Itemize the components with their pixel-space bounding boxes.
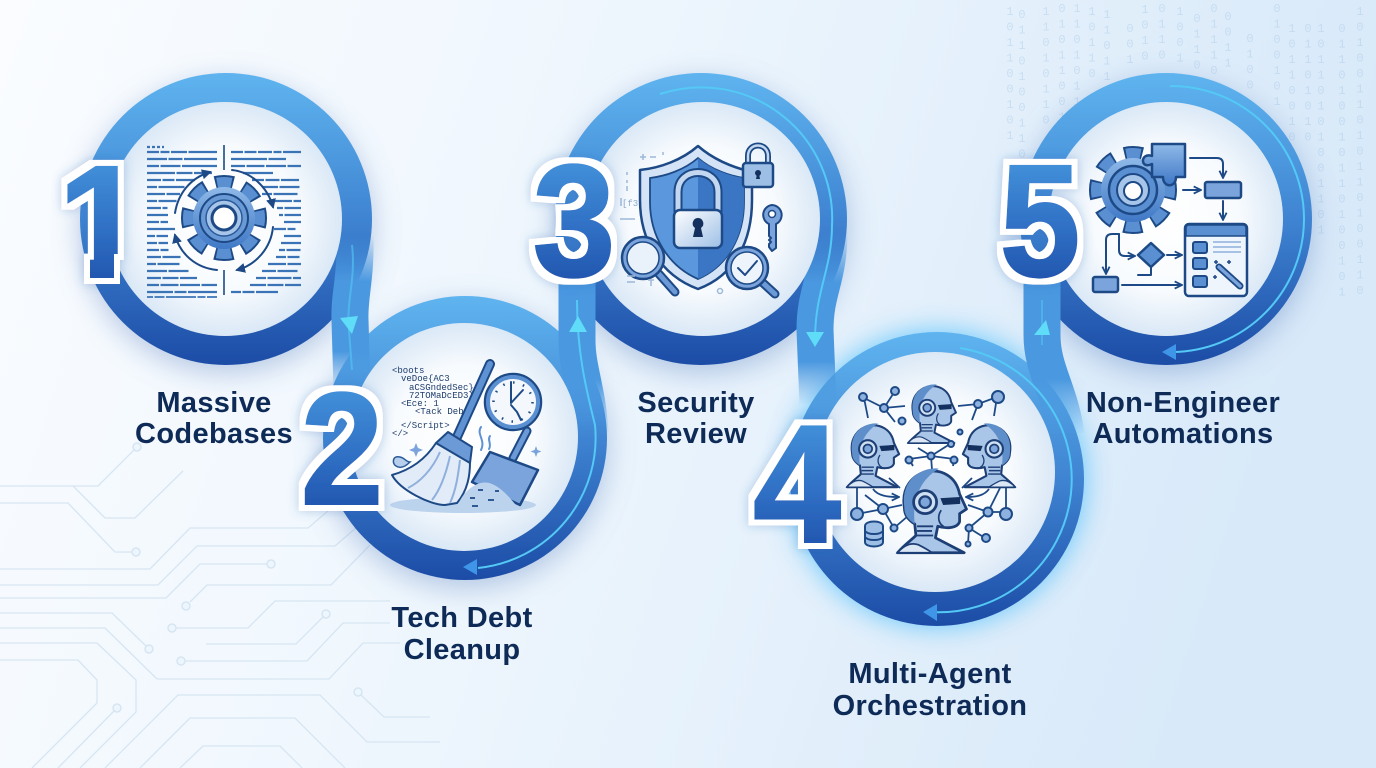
label 5: Non-Engineer <box>1086 387 1280 419</box>
ring 4 <box>790 332 1084 626</box>
step 1: massive codebases <box>58 102 342 450</box>
inner disc 3 <box>586 102 820 336</box>
binary rain pattern: 10110 <box>1085 5 1099 82</box>
binary rain pattern: 0110 <box>1155 2 1169 64</box>
binary rain pattern: 01011001 <box>1055 2 1069 126</box>
binary rain pattern: 0011 <box>1221 10 1235 72</box>
binary rain pattern: 1101011 <box>1070 2 1084 110</box>
label 4: Multi-Agent <box>848 658 1012 690</box>
icon: broom, clock, dustpan: <boots <box>392 366 424 376</box>
connector bands <box>350 230 1066 435</box>
arrowheads <box>340 316 1176 621</box>
number 1: 1 <box>58 132 146 311</box>
binary rain pattern: 1010011010110100110 <box>1353 5 1367 300</box>
binary rain pattern: 11011 <box>1100 8 1114 86</box>
step 4: multi-agent orchestration <box>753 352 1055 722</box>
step 5: non-engineer automations <box>1000 102 1283 450</box>
binary rain pattern: 011010010110100101 <box>1335 22 1349 301</box>
label 3: Security <box>637 387 755 419</box>
label 1: Massive <box>156 387 272 419</box>
binary rain pattern: 0100 <box>1243 32 1257 94</box>
icon: broom, clock, dustpan: </Script> <box>401 421 450 431</box>
inner disc 1 <box>108 102 342 336</box>
number 4: 4 <box>753 390 841 578</box>
binary rain pattern: 101100101 <box>1003 5 1017 144</box>
icon: shield and padlock: [f3 <box>622 199 638 209</box>
number 5: 5 <box>1000 131 1080 310</box>
label 4: Orchestration <box>833 690 1027 722</box>
icon: gear, puzzle and workflow <box>1091 144 1247 296</box>
icon: broom, clock, dustpan: </> <box>392 429 408 439</box>
label 2: Cleanup <box>404 634 520 666</box>
binary rain pattern: 0110 <box>1190 12 1204 74</box>
binary rain pattern: 01110 <box>1207 2 1221 80</box>
binary rain pattern: 0100101 <box>1270 2 1284 110</box>
inner disc 5 <box>1049 102 1283 336</box>
binary rain pattern: 10110101001101 <box>1314 22 1328 239</box>
flow lines <box>348 86 1304 612</box>
step 2: tech debt cleanup <box>300 323 578 666</box>
inner disc 2 <box>350 323 578 551</box>
icon: broom, clock, dustpan: aCSGndedSec}, <box>409 383 479 393</box>
icon: broom, clock, dustpan: <Tack Debt; <box>415 407 474 417</box>
circuit board pattern <box>0 443 440 768</box>
icon: code and gear <box>147 145 301 297</box>
inner disc 4 <box>815 352 1055 592</box>
ring 2 <box>323 296 607 580</box>
binary rain pattern: 1001 <box>1173 5 1187 67</box>
binary rain pattern: 01101010 <box>1301 22 1315 146</box>
step 3: security review <box>532 102 820 450</box>
label 5: Automations <box>1092 418 1274 450</box>
icon: robot heads network <box>847 384 1015 553</box>
number 3: 3 <box>532 131 616 310</box>
icon: broom, clock, dustpan: <Ece: 1 <box>401 399 439 409</box>
binary rain pattern <box>1003 2 1367 301</box>
ring 1 <box>80 73 372 365</box>
icon: broom, clock, dustpan: 72TOMaDcED3) <box>409 391 474 401</box>
icon: shield and padlock <box>620 146 782 294</box>
label 1: Codebases <box>135 418 293 450</box>
ring 3 <box>555 73 847 365</box>
binary rain pattern: 11010110 <box>1039 5 1053 129</box>
binary rain pattern: 0110100110 <box>1015 8 1029 163</box>
label 3: Review <box>645 418 747 450</box>
binary rain pattern: 001 <box>1123 22 1137 68</box>
label 2: Tech Debt <box>391 602 533 634</box>
ring 5 <box>1020 73 1312 365</box>
binary rain pattern: 10110010 <box>1285 22 1299 146</box>
icon: broom, clock, dustpan: veDoe{AC3 <box>401 374 450 384</box>
binary rain pattern: 1010 <box>1138 3 1152 65</box>
icon: broom, clock, dustpan <box>390 364 542 513</box>
number 2: 2 <box>300 359 384 538</box>
